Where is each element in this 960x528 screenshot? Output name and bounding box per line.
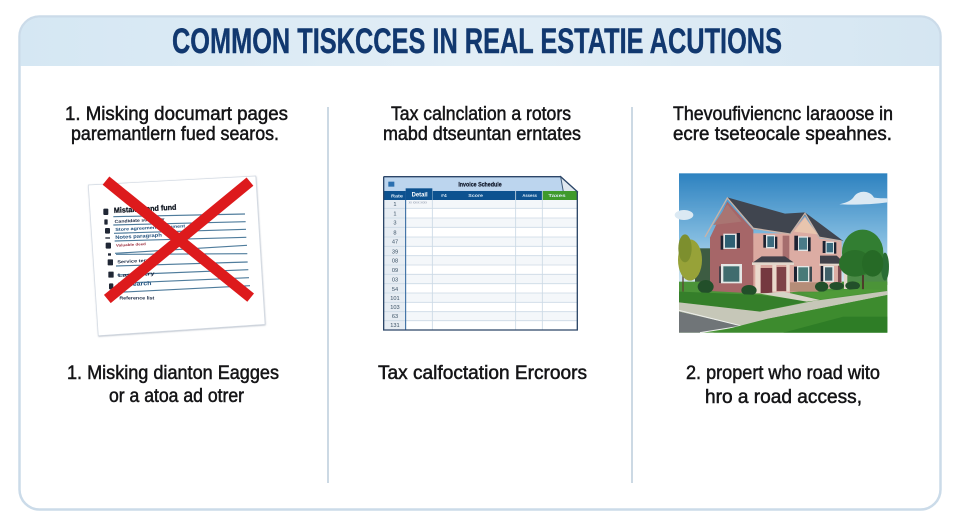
icon: crossed-out document — [88, 176, 265, 336]
text block: column 2 caption: Tax calfoctation Ercroors — [378, 362, 587, 384]
row numbers: 131 — [390, 323, 400, 329]
column labels: #4 — [441, 193, 447, 199]
text block: column 3 caption: hro a road access, — [705, 386, 862, 408]
sheet body — [384, 177, 577, 330]
document text — [114, 203, 186, 300]
alternating rows — [406, 200, 577, 321]
image: suburban house — [675, 173, 889, 333]
roof trim — [705, 198, 842, 241]
folded corner — [561, 177, 577, 192]
text block: column 1 intro: paremantlern fued searos. — [71, 123, 279, 145]
text block: column 3 caption: 2. propert who road wito — [686, 362, 880, 384]
grid — [384, 191, 577, 330]
text block: column 3 caption — [686, 362, 880, 408]
header band — [20, 18, 940, 66]
column dividers — [328, 107, 632, 483]
sheet heading: Invoice Schedule — [458, 183, 502, 189]
stone base — [790, 282, 818, 292]
column labels: Detail — [412, 191, 428, 198]
column labels — [391, 191, 566, 199]
green header cell — [543, 191, 577, 200]
document text: Service terms — [117, 257, 155, 264]
highlighted header cell — [406, 188, 432, 200]
background trees — [847, 270, 887, 285]
document text: Store agreement document — [115, 223, 186, 232]
document text: Valuable deed — [116, 242, 146, 248]
text block: column 1 intro: 1. Misking documart pages — [65, 103, 288, 125]
red cross — [106, 181, 251, 299]
row numbers: 08 — [392, 258, 398, 264]
column labels: Assess — [522, 193, 537, 199]
row numbers: 1 — [393, 202, 397, 208]
left tree — [678, 234, 702, 292]
row numbers: 54 — [392, 287, 398, 293]
column labels: Score — [468, 193, 483, 199]
doors — [755, 265, 847, 293]
house left wing — [710, 202, 754, 293]
document lines — [113, 214, 250, 292]
text block: column 2 intro — [383, 103, 581, 145]
document text: Candidate summary — [114, 216, 165, 224]
windows — [719, 233, 836, 283]
foreground lawn — [713, 295, 887, 333]
row-number column — [384, 200, 406, 329]
row numbers: 63 — [392, 314, 398, 320]
row numbers: 39 — [392, 249, 398, 255]
right tree — [839, 230, 883, 290]
house right wing — [789, 217, 842, 292]
document text: Research — [120, 281, 152, 289]
text block: column 3 intro — [673, 103, 893, 145]
text block: column 2 intro: Tax calnclation a rotors — [391, 103, 571, 125]
text block: column 1 caption: or a atoa ad otrer — [109, 385, 244, 407]
roof — [727, 197, 843, 241]
text block: column 1 caption — [67, 362, 279, 407]
sidewalk — [679, 291, 887, 327]
row numbers — [390, 202, 400, 329]
row numbers: 1 — [393, 211, 397, 217]
column labels: Rate — [391, 193, 403, 199]
front lawn — [679, 292, 810, 312]
text block: column 1 intro — [65, 103, 288, 145]
ground — [679, 282, 887, 333]
small note: xx xxxx xxxx — [409, 201, 427, 205]
row numbers: 103 — [390, 305, 400, 311]
column labels: Taxes — [548, 193, 566, 199]
icon: spreadsheet — [384, 177, 577, 330]
road — [679, 312, 742, 333]
text block: column 2 intro: mabd dtseuntan erntates — [383, 123, 581, 145]
row numbers: 101 — [390, 296, 400, 302]
row numbers: 03 — [392, 278, 398, 284]
row numbers: 09 — [392, 268, 398, 274]
sky — [679, 173, 887, 283]
text block: column 1 caption: 1. Misking dianton Eagges — [67, 362, 279, 384]
row numbers: 3 — [393, 221, 397, 227]
shrubs — [698, 280, 860, 296]
row numbers: 8 — [393, 230, 397, 236]
document text: Last entry — [118, 271, 155, 279]
clouds — [675, 192, 887, 220]
porches — [753, 256, 794, 263]
text block: column 3 intro: Thevoufiviencnc laraoose in — [673, 103, 893, 125]
document text: Reference list — [119, 295, 155, 300]
document sheet — [88, 176, 265, 336]
document bullets — [103, 209, 114, 289]
sheet icon — [388, 182, 394, 187]
header row — [384, 191, 543, 200]
row numbers: 47 — [392, 240, 398, 246]
title bar — [384, 177, 567, 191]
house centre — [753, 233, 790, 293]
sheet outline — [384, 177, 577, 330]
text block: column 3 intro: ecre tseteocale speahnes. — [673, 123, 892, 145]
document text: Notes paragraph — [115, 233, 162, 241]
document text: Mistakes and fund — [114, 203, 177, 215]
walkway — [760, 292, 820, 302]
